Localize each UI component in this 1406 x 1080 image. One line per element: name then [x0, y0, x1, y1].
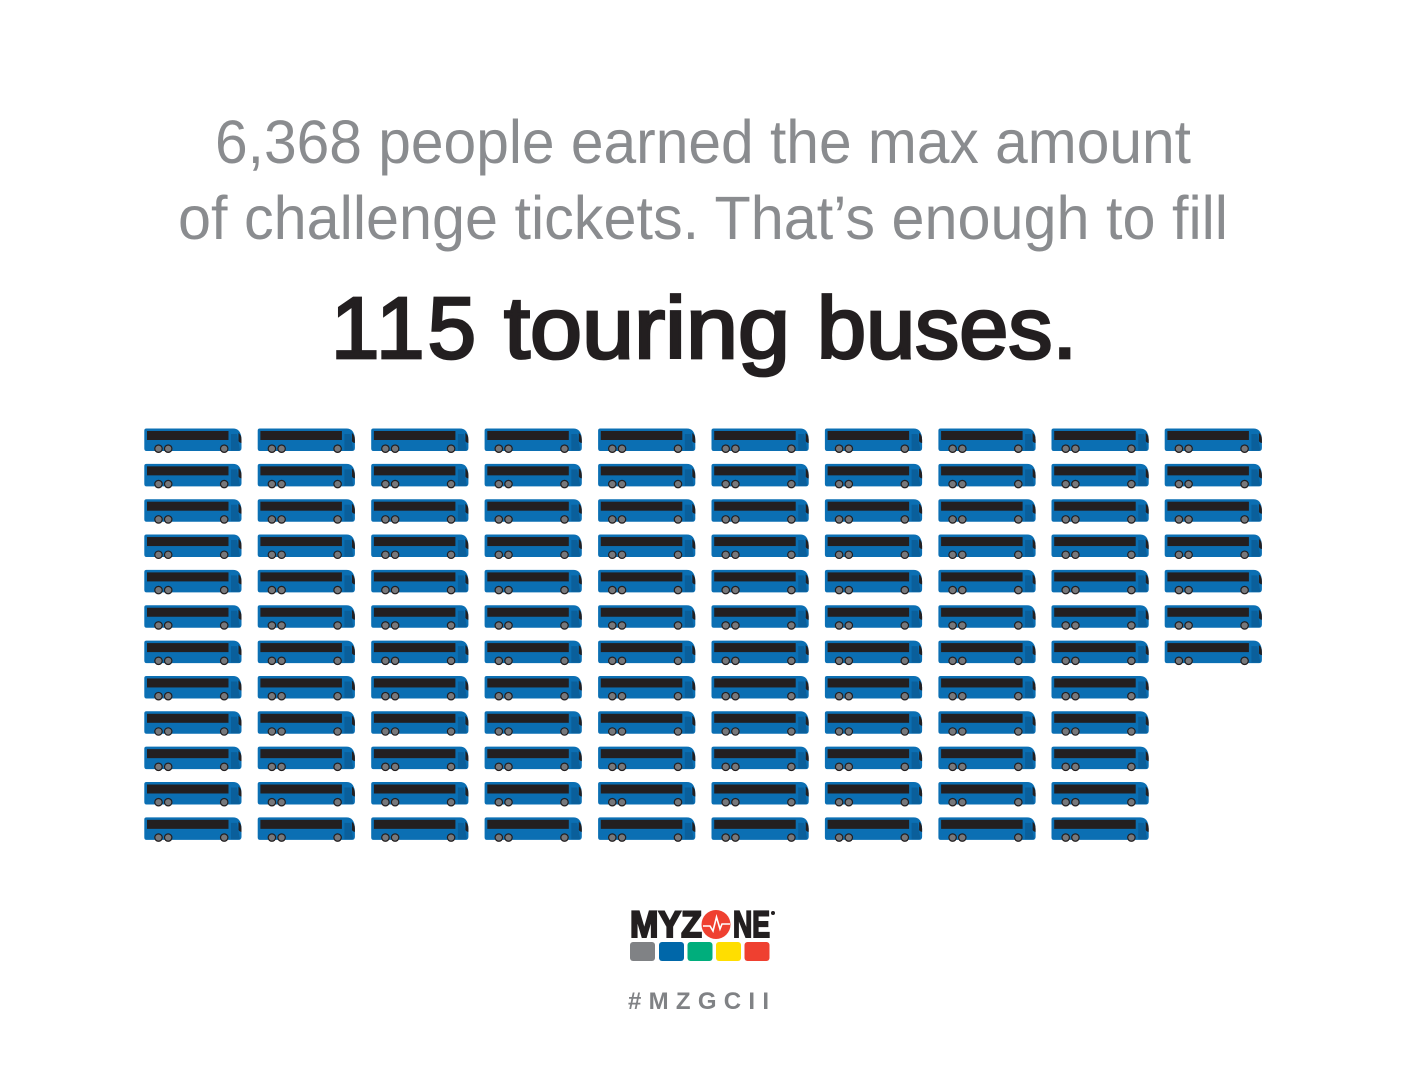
- logo: MYZONE: MYZ: [630, 904, 702, 945]
- headline: 115 touring buses: [331, 280, 1077, 377]
- logo: MYZONE: [630, 904, 775, 961]
- headline: intro sentence: of challenge tickets. That’s enough to fill: [178, 184, 1228, 252]
- hashtag: #MZGCII: [628, 988, 769, 1015]
- logo: MYZONE: NE: [733, 904, 770, 945]
- headline: 115 touring buses: buses.: [817, 280, 1077, 377]
- headline: intro sentence: 6,368 people earned the max amount: [215, 108, 1191, 176]
- pictogram: grid of 115 blue buses: [144, 428, 1262, 842]
- headline: 115 touring buses: 115: [331, 280, 476, 377]
- headline: 115 touring buses: touring: [504, 280, 790, 377]
- headline: intro sentence: [178, 108, 1228, 252]
